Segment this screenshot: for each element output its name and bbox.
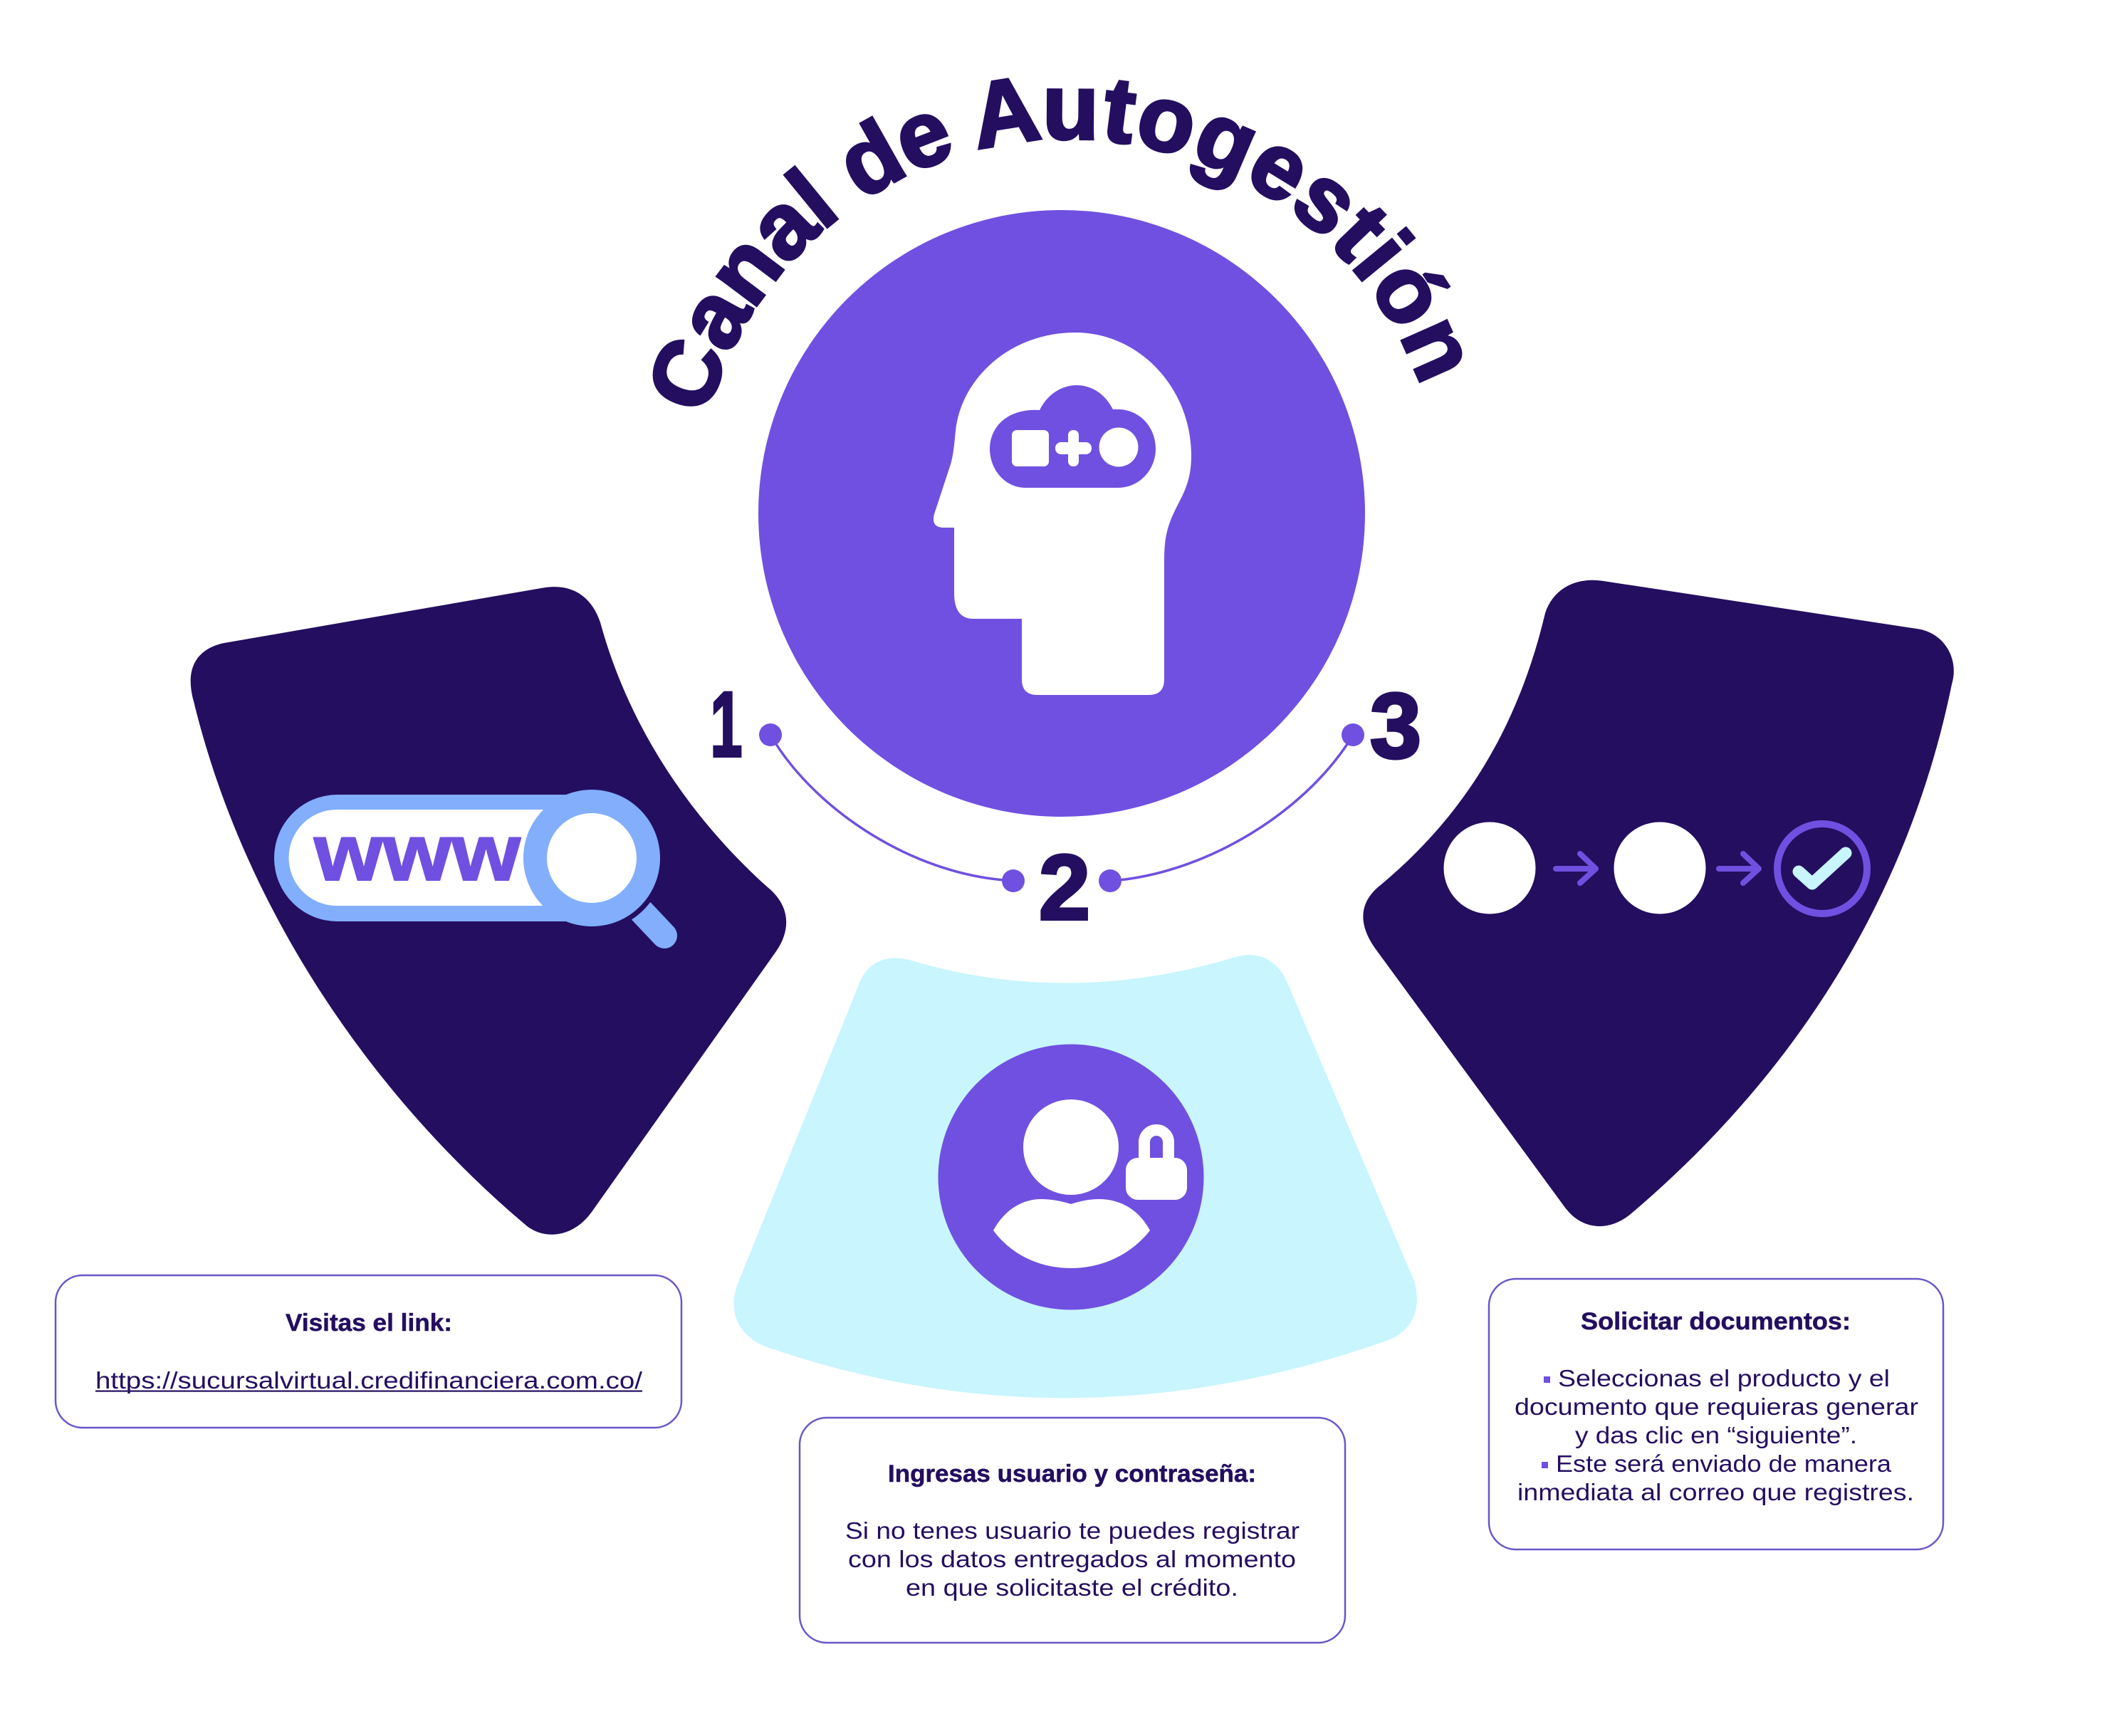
body text (845, 1517, 1300, 1601)
panel: step 1 shape (191, 587, 786, 1235)
body text with bullets: Seleccionas el producto y el (1558, 1365, 1890, 1391)
icon: head with cloud (934, 333, 1191, 695)
body text with bullets: documento que requieras generar (1515, 1393, 1918, 1420)
panel: step 2 shape (734, 955, 1417, 1398)
body text with bullets: Este será enviado de manera (1556, 1450, 1892, 1477)
body text: Si no tenes usuario te puedes registrar (845, 1517, 1300, 1544)
link: https://sucursalvirtual.credifinanciera.com.co/ (95, 1367, 643, 1393)
text box: step 1 (56, 1275, 681, 1428)
body text: en que solicitaste el crédito. (906, 1574, 1238, 1601)
central circle with head icon (758, 210, 1365, 817)
heading: visitas el link: Visitas el link: (286, 1309, 452, 1337)
number 3: 3 (1370, 674, 1421, 778)
number 1: 1 (711, 672, 742, 776)
body text with bullets: inmediata al correo que registres. (1517, 1479, 1914, 1505)
icon: user with padlock (939, 1044, 1203, 1310)
body text with bullets (1515, 1365, 1918, 1505)
connector from step 1 to step 2 (759, 723, 1025, 892)
heading: ingresas usuario y contraseña: Ingresas usuario y contraseña: (888, 1460, 1256, 1487)
connector from step 2 to step 3 (1099, 723, 1364, 892)
body text with bullets: y das clic en “siguiente”. (1575, 1422, 1857, 1448)
body text: con los datos entregados al momento (848, 1546, 1296, 1572)
number 2: 2 (1039, 835, 1090, 939)
icon: www search bar with magnifier: www (313, 808, 521, 897)
icon: process steps with check (1444, 822, 1867, 914)
title: Canal de Autogestión (652, 78, 1463, 407)
heading: solicitar documentos: Solicitar documentos: (1581, 1308, 1851, 1335)
icon: www search bar with magnifier (274, 785, 665, 936)
panel: step 3 shape (1363, 580, 1954, 1226)
text box: step 3 (1489, 1279, 1943, 1549)
text box: step 2 (800, 1418, 1345, 1643)
